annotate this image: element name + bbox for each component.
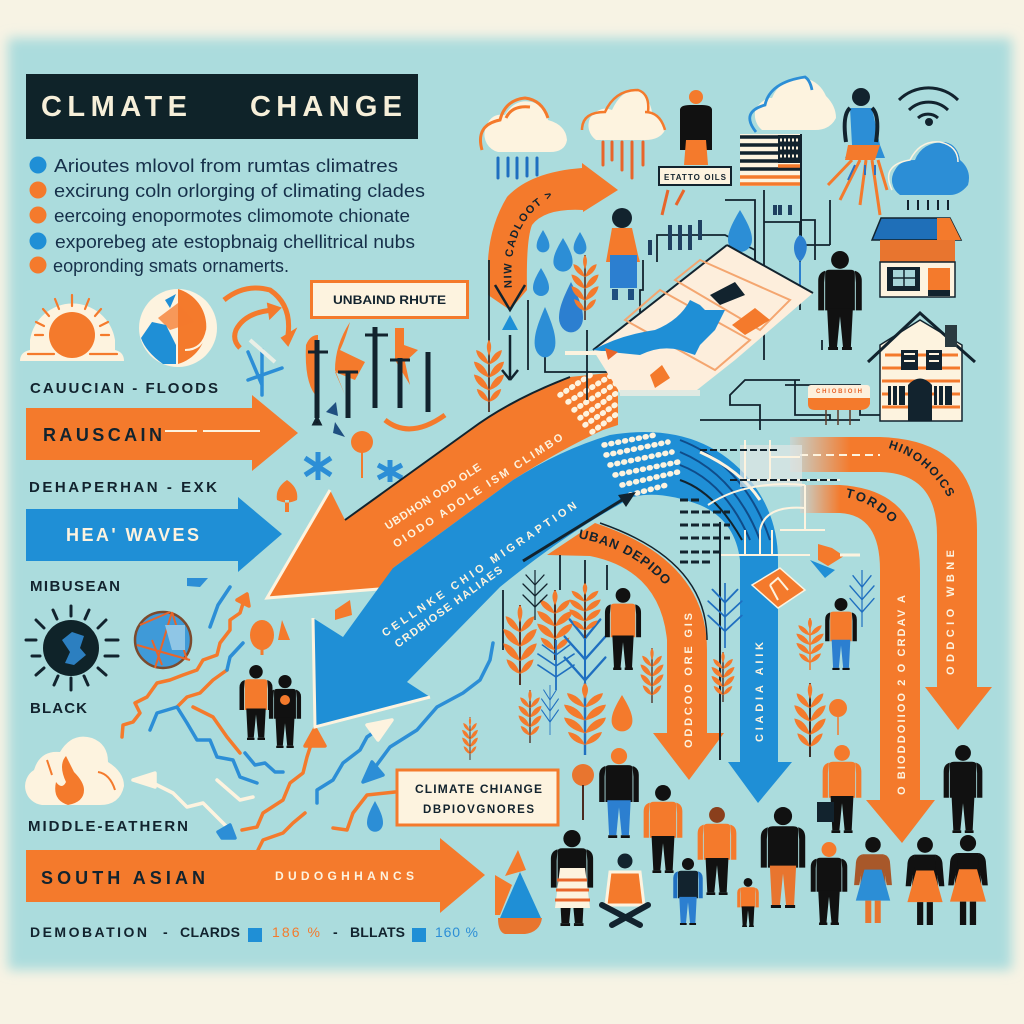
arrow: orange rauscain: RAUSCAIN xyxy=(43,425,162,445)
blue arc stripes xyxy=(680,440,770,540)
cloud: orange left xyxy=(480,98,567,178)
pipe network xyxy=(489,190,885,650)
bullet list: excirung coln orlorging of climating clades xyxy=(54,181,425,201)
stats line: 186 % xyxy=(272,924,320,940)
icon: orange badge xyxy=(752,544,860,608)
caption: caucasian floods: CAUUCIAN - FLOODS xyxy=(30,380,218,397)
arrow: middle orange xyxy=(800,485,935,843)
arrow: middle orange: TORDO xyxy=(847,488,896,522)
arrow: outer orange to right: HINOHOICS xyxy=(888,440,954,496)
stats line: CLARDS xyxy=(180,924,240,940)
stats line: - xyxy=(333,924,338,940)
bullet list xyxy=(30,156,425,276)
icon: cloud with flame xyxy=(25,737,124,805)
stats line: 160 % xyxy=(435,924,478,940)
cloud: blue filled xyxy=(889,142,969,210)
arrow: urban orange xyxy=(547,522,724,780)
arrow: urban orange: UBAN DEPIDO xyxy=(580,529,670,584)
caption: dehaperhan: DEHAPERHAN - EXK xyxy=(29,479,217,496)
bullet list: eopronding smats ornamerts. xyxy=(53,256,289,276)
small trees xyxy=(250,600,352,655)
figure: woman orange and blue xyxy=(606,208,640,300)
stats line xyxy=(30,924,478,942)
icon: boat xyxy=(495,850,542,934)
arrow: urban orange: ODDCOO ORE GIS xyxy=(683,613,695,748)
icon: flag xyxy=(740,134,801,260)
sign: orange bench: CHIOBIOIH xyxy=(816,389,862,395)
callout: climate change box: DBPIOVGNORES xyxy=(423,804,534,816)
title banner: CHANGE xyxy=(250,91,402,123)
arrow: big blue curved: CRDBIOSE HALIAES xyxy=(393,564,505,650)
cloud: orange centre xyxy=(582,90,665,178)
caption: misusean: MIBUSEAN xyxy=(30,578,120,595)
scattered leaves and drops top xyxy=(533,205,807,357)
arrow: big orange curved xyxy=(267,372,618,598)
junction lines xyxy=(680,440,840,760)
sign: orange bench xyxy=(808,385,870,425)
arrow: big orange curved: UBDHON OOD OLE xyxy=(383,461,484,533)
arrow: middle orange: O BIODDOIIOO 2 O CRDAV A xyxy=(896,595,908,795)
figure: black person centre xyxy=(818,251,862,350)
black arrow xyxy=(523,492,636,561)
figure: woman with dress xyxy=(828,88,887,215)
arrow: blue heat waves: HEA' WAVES xyxy=(66,525,199,545)
map: isometric flooded city xyxy=(565,245,813,393)
arrow: outer orange to right: ODDCIO WBNE xyxy=(945,550,957,675)
people: crowd xyxy=(551,588,988,927)
title banner xyxy=(26,74,418,139)
arrow: blue heat waves xyxy=(26,497,282,572)
bullet list: eercoing enopormotes climomote chionate xyxy=(54,206,410,226)
icon: wifi xyxy=(899,88,958,124)
texture: dot patches xyxy=(560,372,678,495)
icon: house top xyxy=(872,218,961,297)
forest of leaves and trees xyxy=(462,570,874,820)
arrow: big blue curved: CELLNKE CHIO MIGRAPTION xyxy=(380,500,579,639)
label: urban route box xyxy=(312,282,468,318)
arrow: south asian: DUDOGHHANCS xyxy=(275,869,414,883)
arrow: top left curved xyxy=(488,163,618,381)
bullet list: exporebeg ate estopbnaig chellitrical nubs xyxy=(55,232,415,252)
title banner: CLMATE xyxy=(41,91,187,123)
wavy arrows xyxy=(122,578,493,850)
label: urban route box: UNBAIND RHUTE xyxy=(333,293,446,307)
callout: climate change box: CLIMATE CHIANGE xyxy=(415,782,542,796)
arrow: top left curved: NIW CADLOOT > xyxy=(504,193,551,288)
arrow: big blue curved: CIADIA AIIK xyxy=(754,642,766,742)
icon: wire globe xyxy=(135,612,191,668)
tree: left leaf xyxy=(474,340,504,412)
arrow: outer orange to right xyxy=(790,437,992,730)
caption: middle-eathern: MIDDLE-EATHERN xyxy=(28,818,188,835)
icon: sun xyxy=(20,295,124,361)
cloud: blue outlined xyxy=(750,77,836,132)
arrow: south asian: SOUTH ASIAN xyxy=(41,868,205,888)
bullet list: Arioutes mlovol from rumtas climatres xyxy=(54,156,398,176)
arrow: big blue curved xyxy=(313,432,792,803)
arrow: south asian xyxy=(26,838,485,913)
caption: black: BLACK xyxy=(30,700,87,717)
icon: circular arrows xyxy=(224,288,295,395)
icon: globe xyxy=(139,289,217,367)
arrow: big orange curved: OIODO ADOLE ISM CLIMBO xyxy=(391,431,566,551)
small leaves and asterisks xyxy=(277,402,445,512)
stats line: BLLATS xyxy=(350,924,405,940)
stats line: - xyxy=(163,924,168,940)
stats line: DEMOBATION xyxy=(30,924,147,940)
icon: sword columns xyxy=(306,322,428,424)
arrow: orange rauscain xyxy=(26,395,298,471)
figure: standing person with label xyxy=(659,90,731,215)
figure: standing person with label: ETATTO OILS xyxy=(664,173,727,182)
icon: house lower xyxy=(868,313,975,421)
icon: dark sun xyxy=(26,606,118,690)
couple figures xyxy=(240,665,301,748)
callout: climate change box xyxy=(367,770,558,832)
